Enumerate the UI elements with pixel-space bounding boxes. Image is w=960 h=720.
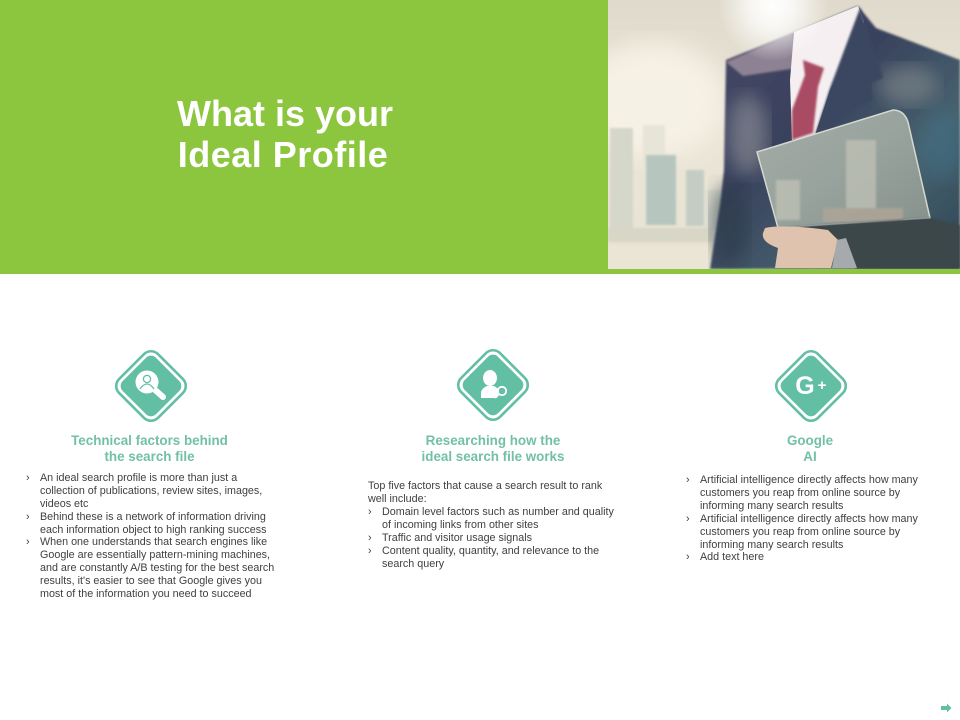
- cloud haze: [581, 42, 725, 158]
- title: What is your: [177, 93, 393, 134]
- bullet list: When one understands that search engines like: [40, 536, 267, 548]
- bullet list: collection of publications, review sites, images,: [40, 485, 262, 497]
- bullet list: Artificial intelligence directly affects how many: [700, 474, 918, 486]
- heading: researching: ideal search file works: [422, 449, 564, 464]
- intro and bullet list: of incoming links from other sites: [382, 519, 539, 531]
- bullet list: each information object to high ranking success: [40, 524, 266, 536]
- heading: technical factors: the search file: [104, 449, 195, 464]
- intro and bullet list: well include:: [368, 493, 427, 505]
- title: [177, 93, 393, 175]
- title: Ideal Profile: [178, 134, 388, 175]
- icon: person with gear: [456, 349, 529, 421]
- bullet list: Behind these is a network of information driving: [40, 511, 266, 523]
- icon: google plus: +: [818, 377, 827, 394]
- column 3: google ai: [686, 350, 918, 563]
- bullet list: videos etc: [40, 498, 88, 510]
- column 1: technical factors: [26, 350, 274, 600]
- bullet list: ›: [26, 536, 30, 548]
- arrow: next: [941, 704, 952, 712]
- hand: [763, 226, 838, 268]
- intro and bullet list: [368, 480, 614, 570]
- intro and bullet list: Content quality, quantity, and relevance to the: [382, 545, 599, 557]
- bullet list: informing many search results: [700, 500, 843, 512]
- bullet list: ›: [686, 474, 690, 486]
- heading: technical factors: [71, 433, 228, 464]
- bullet list: results, it's easier to see that Google gives you: [40, 575, 262, 587]
- bullet list: most of the information you need to succeed: [40, 588, 252, 600]
- heading: google ai: AI: [803, 449, 817, 464]
- heading: google ai: Google: [787, 433, 833, 448]
- bullet list: [686, 474, 918, 563]
- intro and bullet list: ›: [368, 532, 372, 544]
- bullet list: [26, 472, 274, 600]
- intro and bullet list: Domain level factors such as number and quality: [382, 506, 614, 518]
- heading: technical factors: Technical factors behind: [71, 433, 228, 448]
- column 2: researching: [368, 349, 614, 570]
- bullet list: ›: [26, 472, 30, 484]
- jacket lower: [778, 218, 960, 269]
- bullet list: Add text here: [700, 551, 764, 563]
- intro and bullet list: search query: [382, 558, 444, 570]
- green header band: [0, 0, 960, 274]
- intro and bullet list: ›: [368, 545, 372, 557]
- shirt: [790, 6, 864, 140]
- bullet list: Google are essentially pattern-mining machines,: [40, 549, 270, 561]
- intro and bullet list: Top five factors that cause a search result to rank: [368, 480, 602, 492]
- lapel: [815, 8, 883, 135]
- intro and bullet list: ›: [368, 506, 372, 518]
- heading: researching: [422, 433, 564, 464]
- bullet list: customers you reap from online source by: [700, 526, 900, 538]
- heading: google ai: [787, 433, 833, 464]
- icon: google plus: G: [795, 372, 815, 400]
- light glow: [718, 0, 828, 61]
- watch: [832, 238, 857, 268]
- bullet list: Artificial intelligence directly affects how many: [700, 513, 918, 525]
- photo: businessman with city overlay: [608, 0, 960, 269]
- bullet list: ›: [26, 511, 30, 523]
- bullet list: and are constantly A/B testing for the best search: [40, 562, 274, 574]
- suit: [710, 6, 960, 269]
- bullet list: customers you reap from online source by: [700, 487, 900, 499]
- icon: google plus: [775, 350, 847, 422]
- bullet list: ›: [686, 513, 690, 525]
- intro and bullet list: Traffic and visitor usage signals: [382, 532, 532, 544]
- heading: researching: Researching how the: [426, 433, 560, 448]
- tablet: [757, 110, 930, 228]
- bullet list: ›: [686, 551, 690, 563]
- bullet list: informing many search results: [700, 539, 843, 551]
- tie: [792, 60, 824, 140]
- bullet list: An ideal search profile is more than just a: [40, 472, 237, 484]
- icon: magnifier with person: [115, 350, 187, 422]
- skyline: [608, 125, 720, 269]
